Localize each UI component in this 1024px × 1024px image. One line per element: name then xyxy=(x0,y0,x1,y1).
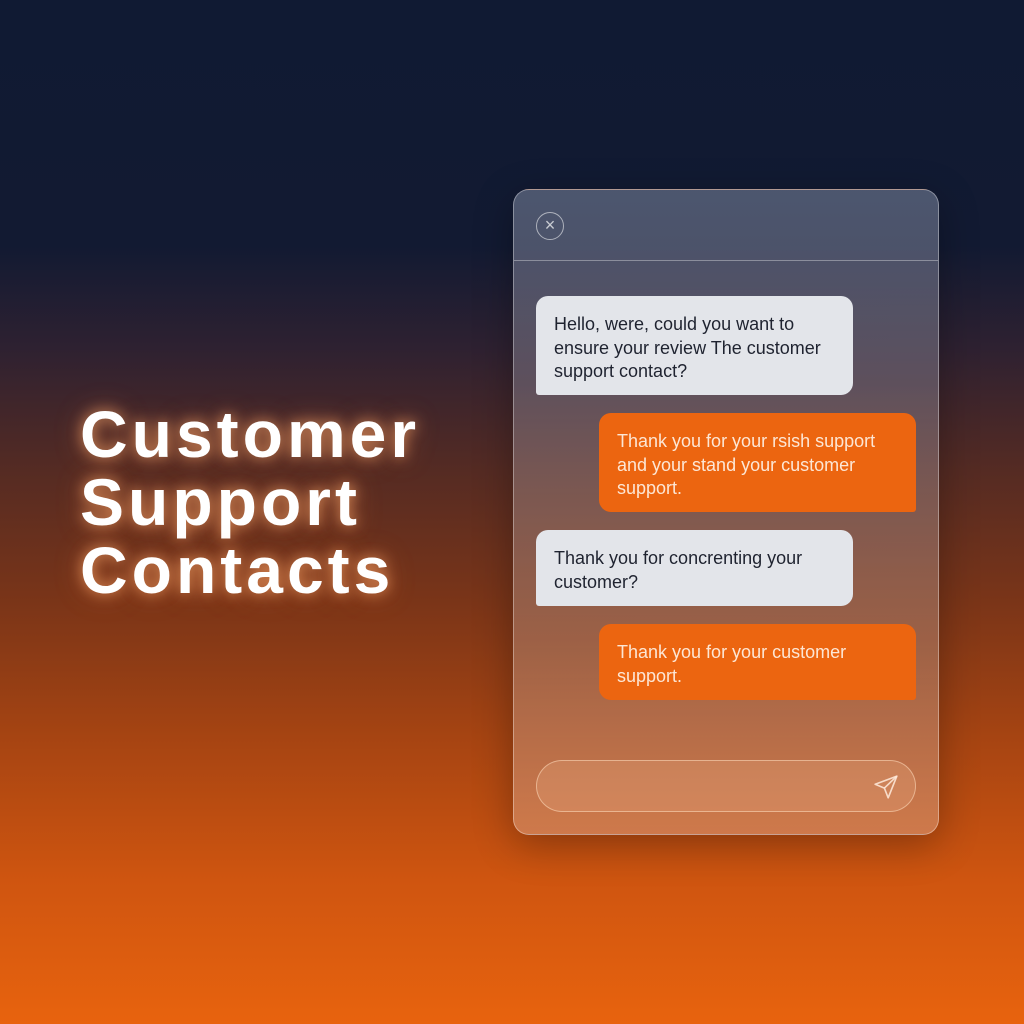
bubble: outgoing 2 xyxy=(599,624,916,700)
bubble: outgoing 1: Thank you for your rsish support and your stand your customer support. xyxy=(617,431,875,498)
title: Contacts xyxy=(80,533,394,607)
bubble: incoming 1: Hello, were, could you want to ensure your review The customer support contact? xyxy=(554,314,821,381)
bubble: incoming 1 xyxy=(536,296,853,395)
panel: chat window xyxy=(513,189,939,835)
title: Support xyxy=(80,465,361,539)
bubble: outgoing 2: Thank you for your customer support. xyxy=(617,642,846,686)
bubble: outgoing 1 xyxy=(599,413,916,512)
icon: close: × xyxy=(545,215,555,235)
icon: close xyxy=(536,212,564,240)
input field with send icon xyxy=(536,760,916,812)
bubble: incoming 2 xyxy=(536,530,853,606)
icon: send xyxy=(874,775,898,799)
bubble: incoming 2: Thank you for concrenting your customer? xyxy=(554,548,802,592)
title: Customer xyxy=(80,397,420,471)
title xyxy=(70,397,425,607)
